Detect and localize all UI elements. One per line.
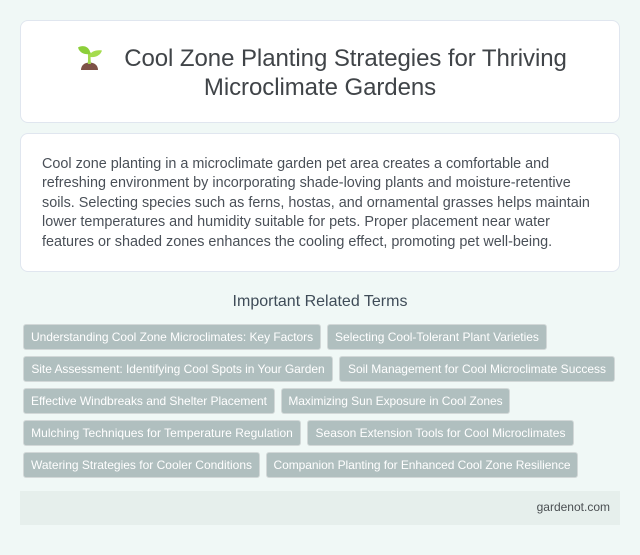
footer source: gardenot.com bbox=[537, 500, 610, 514]
chip: Selecting Cool-Tolerant Plant Varieties bbox=[335, 330, 539, 344]
chip: Understanding Cool Zone Microclimates: Key Factors bbox=[31, 330, 313, 344]
description text: Cool zone planting in a microclimate garden pet area creates a comfortable and bbox=[42, 156, 549, 172]
panel: description bbox=[20, 133, 620, 272]
description text: refreshing environment by incorporating shade-loving plants and moisture-retentive bbox=[42, 175, 571, 191]
chip bbox=[23, 420, 301, 446]
chip bbox=[23, 452, 260, 478]
chip: Season Extension Tools for Cool Microclimates bbox=[316, 426, 565, 440]
chip bbox=[23, 356, 333, 382]
title bbox=[124, 45, 567, 101]
chip: Companion Planting for Enhanced Cool Zone Resilience bbox=[273, 458, 571, 472]
chip bbox=[327, 324, 547, 350]
chip: Effective Windbreaks and Shelter Placement bbox=[31, 394, 267, 408]
panel: title card bbox=[20, 20, 620, 123]
chip bbox=[307, 420, 574, 446]
description text: soils. Selecting species such as ferns, hostas, and ornamental grasses helps maintain bbox=[42, 195, 590, 211]
chip: Mulching Techniques for Temperature Regulation bbox=[31, 426, 293, 440]
chip bbox=[281, 388, 510, 414]
chip bbox=[266, 452, 578, 478]
description text: lower temperatures and humidity suitable for pets. Proper placement near water bbox=[42, 214, 550, 230]
icon: seedling bbox=[78, 46, 102, 70]
title: Cool Zone Planting Strategies for Thriving bbox=[124, 45, 567, 72]
chip: Soil Management for Cool Microclimate Success bbox=[348, 362, 606, 376]
footer bar bbox=[20, 491, 620, 525]
chip: Watering Strategies for Cooler Conditions bbox=[31, 458, 252, 472]
heading: related terms: Important Related Terms bbox=[233, 293, 407, 310]
chip bbox=[23, 324, 321, 350]
title: Microclimate Gardens bbox=[204, 74, 436, 101]
description text bbox=[42, 156, 590, 250]
chip: Site Assessment: Identifying Cool Spots in Your Garden bbox=[31, 362, 325, 376]
description text: features or shaded zones enhances the cooling effect, promoting pet well-being. bbox=[42, 234, 552, 250]
related terms chips bbox=[23, 324, 615, 478]
chip bbox=[23, 388, 275, 414]
chip: Maximizing Sun Exposure in Cool Zones bbox=[288, 394, 503, 408]
chip bbox=[339, 356, 615, 382]
